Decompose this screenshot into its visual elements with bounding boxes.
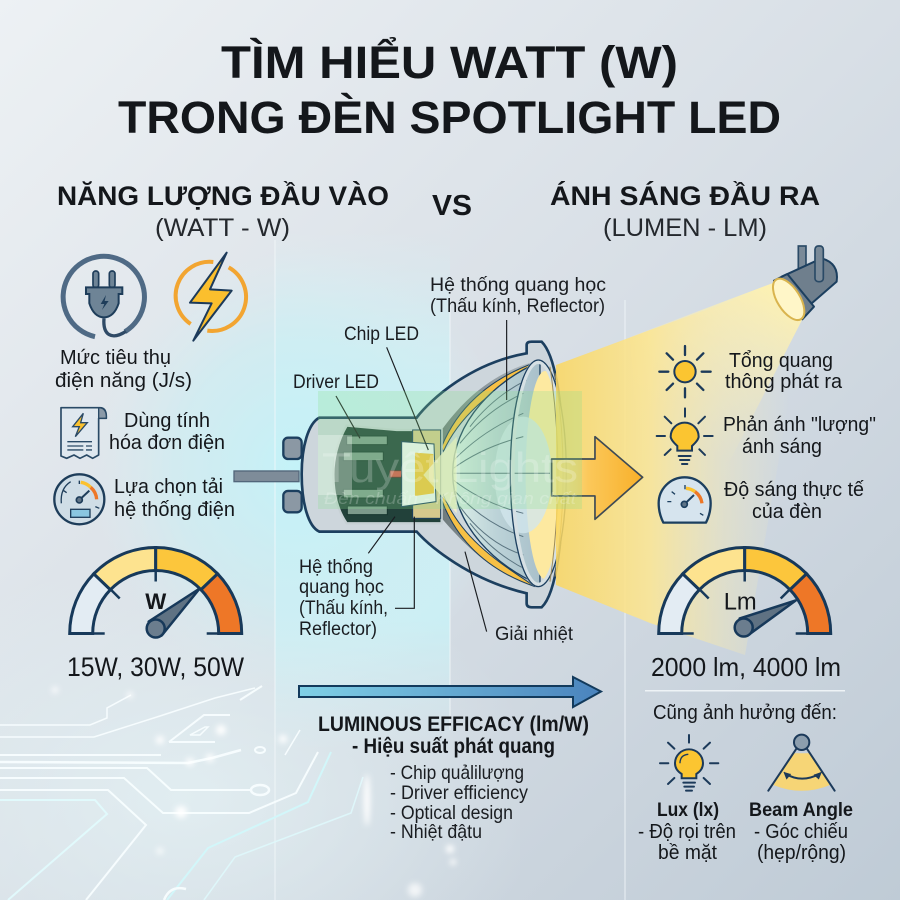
title: TRONG ĐÈN SPOTLIGHT LED <box>118 92 781 143</box>
grey reflector wedges <box>442 361 538 588</box>
text: lux <box>638 800 736 864</box>
list: efficacy factors: - Driver efficiency <box>390 782 528 804</box>
chip die <box>415 453 434 496</box>
panel: input column <box>54 253 246 682</box>
arrow: efficacy <box>299 677 601 707</box>
heading: input energy: NĂNG LƯỢNG ĐẦU VÀO <box>57 180 389 211</box>
panel: luminous efficacy <box>318 713 589 843</box>
panel: output column <box>638 246 876 864</box>
text: also affects: Cũng ảnh hưởng đến: <box>653 702 837 724</box>
chart: lumen gauge <box>659 548 831 636</box>
leader lines <box>336 320 507 632</box>
text: amount of light <box>723 414 876 458</box>
text: beam angle: (hẹp/rộng) <box>757 842 846 864</box>
text: lumen values: 2000 lm, 4000 lm <box>651 652 841 682</box>
icon: beam angle <box>768 735 835 791</box>
text: real brightness <box>724 479 864 523</box>
circuit pattern <box>0 686 363 900</box>
arrow: output <box>552 437 643 519</box>
chip LED <box>402 442 436 507</box>
panel: LED bulb cutaway <box>234 320 566 632</box>
chart: lumen gauge: Lm <box>724 588 757 616</box>
text: total flux: thông phát ra <box>725 371 843 393</box>
chart: watt gauge: W <box>145 589 166 614</box>
chip mount <box>413 430 441 518</box>
icon: lux bulb <box>660 735 718 791</box>
list: efficacy factors <box>390 762 528 843</box>
icon: load gauge <box>54 474 104 524</box>
text: total flux: Tổng quang <box>729 350 833 372</box>
text: amount of light: ánh sáng <box>742 436 822 458</box>
bulb labels: Driver LED <box>293 371 379 393</box>
icon: plug <box>63 256 144 337</box>
heading: output light <box>550 180 820 242</box>
bulb labels <box>293 274 606 645</box>
divider <box>645 690 845 692</box>
concentric edge arcs <box>550 367 563 582</box>
bulb labels: Giải nhiệt <box>495 623 574 645</box>
list: efficacy factors: - Chip quảlilượng <box>390 762 524 784</box>
icon: lightning <box>176 253 246 341</box>
heading: input energy <box>57 180 389 242</box>
text: beam angle <box>749 800 853 864</box>
text: watt values: 15W, 30W, 50W <box>67 652 244 682</box>
pins <box>283 438 302 512</box>
icon: bill <box>61 408 106 458</box>
spotlight beam <box>630 283 802 480</box>
front opening <box>526 371 564 579</box>
bulb labels: quang học <box>299 576 384 598</box>
heading: input energy: (WATT - W) <box>155 214 290 242</box>
text: load selection: Lựa chọn tải <box>114 476 223 498</box>
text: real brightness: của đèn <box>752 501 822 523</box>
text: load selection <box>114 476 235 521</box>
title <box>118 37 781 143</box>
text: real brightness: Độ sáng thực tế <box>724 479 864 501</box>
cutaway interior <box>333 426 442 523</box>
outer shell <box>302 342 563 607</box>
text: load selection: hệ thống điện <box>114 499 235 521</box>
icon: brightness dial <box>659 477 711 523</box>
bulb labels: Reflector) <box>299 618 377 640</box>
heading: efficacy: - Hiệu suất phát quang <box>352 735 555 758</box>
text: bill use: Dùng tính <box>124 410 210 432</box>
text: lux: - Độ rọi trên <box>638 821 736 843</box>
icon: spotlight <box>767 246 837 325</box>
bulb labels: (Thấu kính, Reflector) <box>430 295 605 317</box>
heading: output light: (LUMEN - LM) <box>603 214 767 242</box>
bulb labels: (Thấu kính, <box>299 597 388 619</box>
heading: output light: ÁNH SÁNG ĐẦU RA <box>550 180 820 211</box>
chart: watt gauge <box>70 548 242 638</box>
bulb labels: Hệ thống <box>299 556 373 578</box>
text: beam angle: - Góc chiếu <box>754 821 848 843</box>
heat sink fins <box>343 436 387 515</box>
wire <box>234 471 299 482</box>
text: power consumption <box>55 347 192 392</box>
bulb labels: Chip LED <box>344 323 419 345</box>
text: lux: Lux (lx) <box>657 800 719 821</box>
text: power consumption: Mức tiêu thụ <box>60 347 171 369</box>
light beam from bulb <box>556 280 803 655</box>
lens <box>495 417 552 533</box>
list: efficacy factors: - Nhiệt đậtu <box>390 821 482 843</box>
text: bill use: hóa đơn điện <box>109 432 225 454</box>
text: amount of light: Phản ánh "lượng" <box>723 414 876 436</box>
front ring <box>512 362 564 585</box>
watermark: Tuyết Lights <box>322 444 578 491</box>
text: power consumption: điện năng (J/s) <box>55 370 192 392</box>
text: bill use <box>109 410 225 454</box>
yellow reflector strips <box>442 363 535 587</box>
watermark: Đèn chuẩn - Không gian chất <box>324 489 577 508</box>
watermark <box>318 391 582 509</box>
title: TÌM HIỂU WATT (W) <box>221 37 678 88</box>
heading: efficacy: LUMINOUS EFFICACY (lm/W) <box>318 713 589 736</box>
glass bowl <box>453 362 540 585</box>
bulb labels: Hệ thống quang học <box>430 274 606 296</box>
list: efficacy factors: - Optical design <box>390 802 513 824</box>
icon: bulb <box>657 408 713 464</box>
facet lines <box>453 380 550 570</box>
heading: vs: VS <box>432 190 472 222</box>
light cone <box>423 437 457 513</box>
wiring <box>390 471 405 477</box>
text: beam angle: Beam Angle <box>749 800 853 821</box>
text: lux: bề mặt <box>658 842 717 864</box>
ring outline <box>510 360 566 587</box>
icon: sun <box>659 346 711 397</box>
heading: efficacy <box>318 713 589 758</box>
text: total flux <box>725 350 843 393</box>
circuit glow dots <box>52 687 456 897</box>
